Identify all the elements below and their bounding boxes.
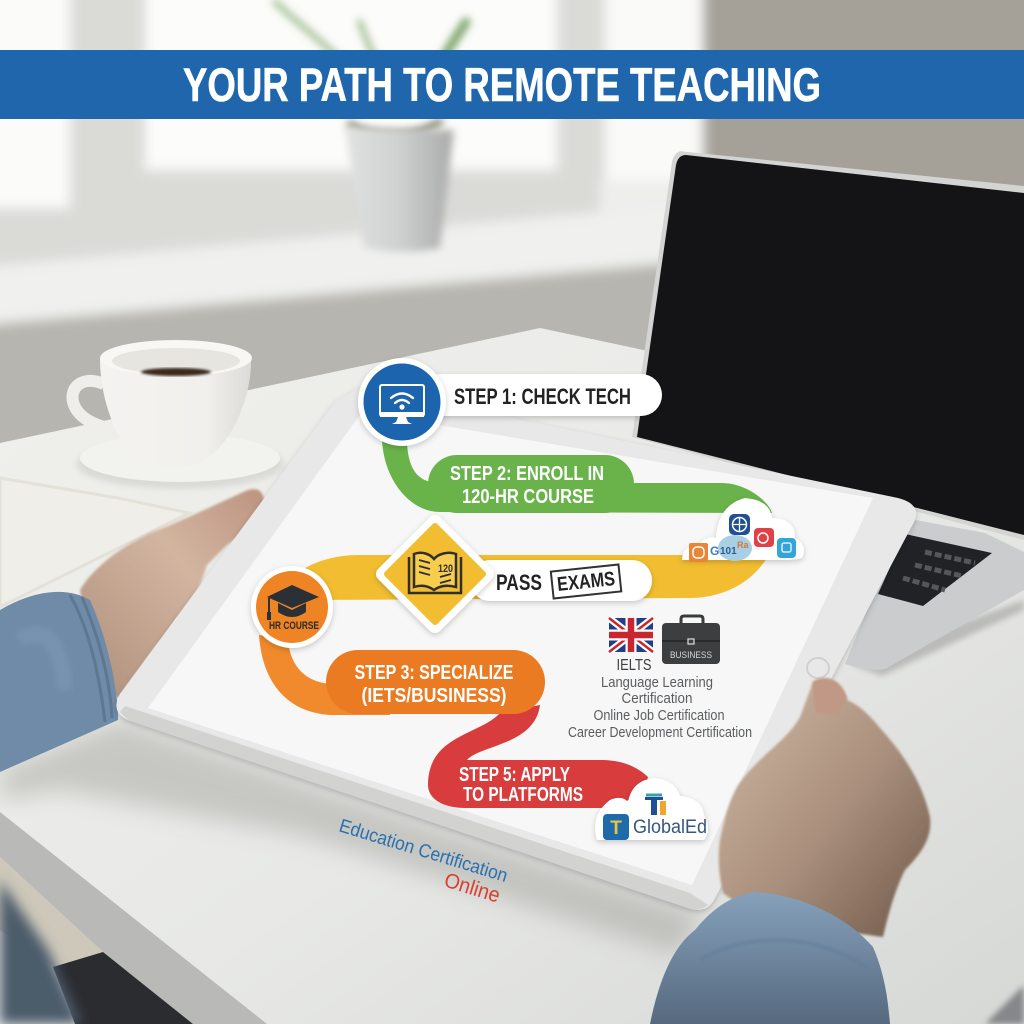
step 3 pill: [326, 650, 545, 714]
GlobalEd cloud logo: [595, 778, 708, 840]
step 2 pill: 120-HR COURSE: [462, 486, 594, 508]
pass exams label: [470, 560, 652, 601]
icon: red app: [754, 528, 774, 547]
icon: orange app: [689, 543, 708, 562]
icon: business briefcase: BUSINESS: [670, 650, 712, 661]
step 1 label: [420, 374, 662, 416]
icon: blue app: [777, 538, 796, 558]
path: orange ribbon: [259, 635, 545, 715]
UK flag: [609, 618, 653, 652]
pass exams label: PASS: [496, 570, 542, 595]
dark wall right: [703, 0, 1024, 210]
icon: book on yellow diamond: 120: [438, 563, 453, 575]
icon: graduation cap HR course: [251, 566, 333, 648]
lower wall: [0, 262, 680, 470]
sill: [0, 205, 680, 325]
icon: blue bubble with text: [710, 535, 752, 561]
laptop: [632, 151, 1024, 676]
left arm and hand: [0, 489, 264, 772]
step 5 label: [459, 764, 583, 806]
icon: book on yellow diamond: [383, 522, 487, 626]
certification list: Certification: [622, 690, 692, 707]
title: YOUR PATH TO REMOTE TEACHING: [183, 58, 821, 111]
certification list: Career Development Certification: [568, 724, 752, 741]
icon: business briefcase: [662, 616, 720, 664]
education certification caption: Education Certification: [337, 816, 510, 887]
tablet: [116, 388, 916, 910]
laptop lid: [632, 151, 1024, 540]
title banner: [0, 50, 1024, 119]
GlobalEd cloud logo: GlobalEd: [633, 817, 707, 838]
window plant in pot: [275, 2, 466, 252]
step 2 pill: [428, 455, 634, 513]
step 1 label: STEP 1: CHECK TECH: [454, 384, 631, 409]
icon: globe: [729, 514, 750, 535]
icon: step 1 monitor wifi: [358, 358, 446, 446]
coffee cup on saucer: [72, 340, 284, 489]
path: red ribbon: [428, 705, 648, 808]
icon: graduation cap HR course: HR COURSE: [269, 620, 319, 632]
tablet screen: [148, 412, 873, 885]
education certification caption: Online: [442, 869, 503, 907]
exams stamp: EXAMS: [556, 568, 616, 596]
tablet lower edge: [120, 706, 708, 909]
window panes: [0, 0, 70, 208]
desk surface: [0, 328, 1024, 1024]
notebook on desk: [0, 478, 189, 607]
cloud: [682, 498, 804, 560]
step 2 pill: STEP 2: ENROLL IN: [450, 463, 604, 485]
path: yellow ribbon: [268, 553, 767, 622]
step 5 label: STEP 5: APPLY: [459, 764, 571, 786]
home button: [807, 658, 829, 678]
logo icon T: T: [610, 818, 622, 839]
icon: blue bubble with text: 101: [720, 546, 737, 557]
laptop shadow: [850, 600, 1024, 676]
path: green ribbon: [382, 440, 772, 513]
certification list: IELTS: [616, 657, 652, 674]
tablet body: [116, 388, 916, 910]
certification list: Language Learning: [601, 674, 713, 691]
right arm and hand: [650, 679, 930, 1024]
certification list: Online Job Certification: [594, 707, 724, 724]
cloud of course platform icons: [682, 498, 804, 562]
desk shadow under tablet: [0, 720, 700, 955]
step 3 pill: STEP 3: SPECIALIZE: [354, 662, 514, 684]
icon: blue bubble with text: Ra: [737, 540, 749, 550]
step 3 pill: (IETS/BUSINESS): [362, 685, 506, 707]
icon: blue bubble with text: G: [710, 544, 719, 558]
desk front edge and floor: [0, 812, 1024, 1024]
step 5 label: TO PLATFORMS: [463, 784, 583, 806]
window frame: [0, 0, 720, 280]
certification list: [568, 657, 752, 741]
laptop base and keyboard: [845, 518, 1024, 670]
